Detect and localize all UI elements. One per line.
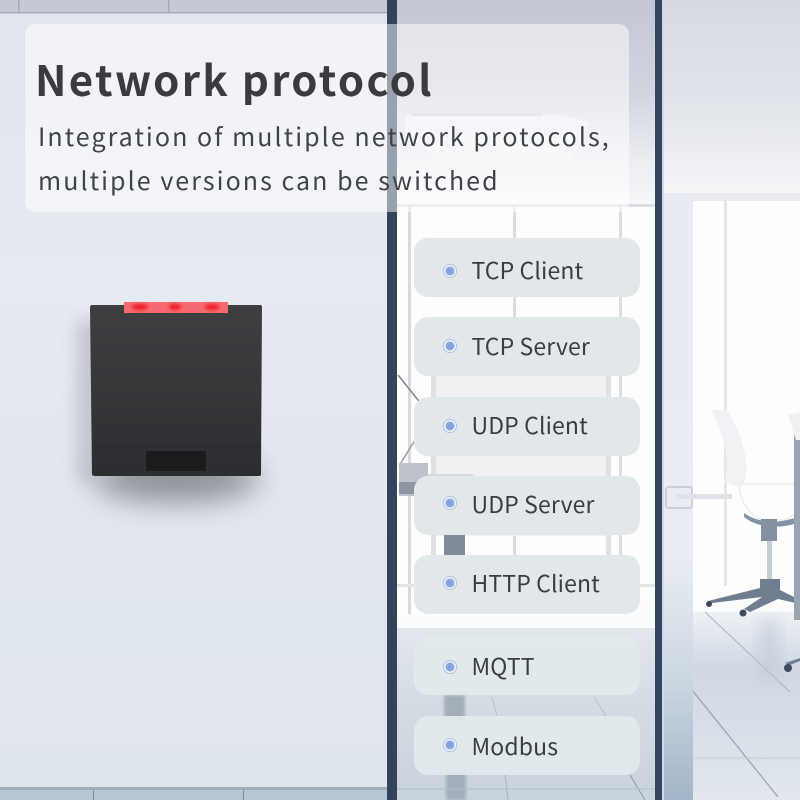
right area — [663, 0, 800, 800]
protocol item: TCP Client: TCP Client — [472, 252, 583, 286]
desk unit — [399, 463, 428, 496]
heading panel — [25, 24, 629, 212]
protocol item: MQTT — [414, 636, 640, 695]
protocol item: TCP Server: TCP Server — [472, 328, 590, 362]
title: Network protocol — [35, 48, 434, 109]
glass room — [397, 0, 655, 800]
protocol item: UDP Server: UDP Server — [472, 486, 595, 520]
office chair — [706, 410, 800, 672]
ceiling lamp — [405, 115, 590, 158]
card reader device — [90, 302, 262, 476]
bottom tile strip — [0, 787, 388, 800]
protocol item: HTTP Client — [414, 555, 640, 614]
reader shadow — [76, 320, 260, 502]
reader body — [90, 305, 262, 476]
left glass frame — [387, 0, 397, 800]
protocol item: MQTT: MQTT — [472, 648, 535, 682]
description line 2: multiple versions can be switched — [38, 162, 500, 198]
protocol item: TCP Server — [414, 317, 640, 376]
description line 1: Integration of multiple network protocols, — [38, 118, 611, 154]
center glass frame — [655, 0, 662, 800]
protocol item: Modbus: Modbus — [472, 728, 558, 762]
protocol item: TCP Client — [414, 238, 640, 297]
protocol item: HTTP Client: HTTP Client — [472, 565, 600, 599]
wall — [0, 0, 388, 800]
bottom seam — [92, 445, 261, 447]
red LED bar — [124, 302, 228, 313]
top tile strip — [0, 0, 388, 14]
protocol item: UDP Server — [414, 476, 640, 535]
reader window — [146, 451, 206, 471]
protocol item: UDP Client: UDP Client — [472, 407, 588, 441]
protocol item: UDP Client — [414, 397, 640, 456]
door handle — [666, 487, 692, 508]
protocol item: Modbus — [414, 716, 640, 775]
